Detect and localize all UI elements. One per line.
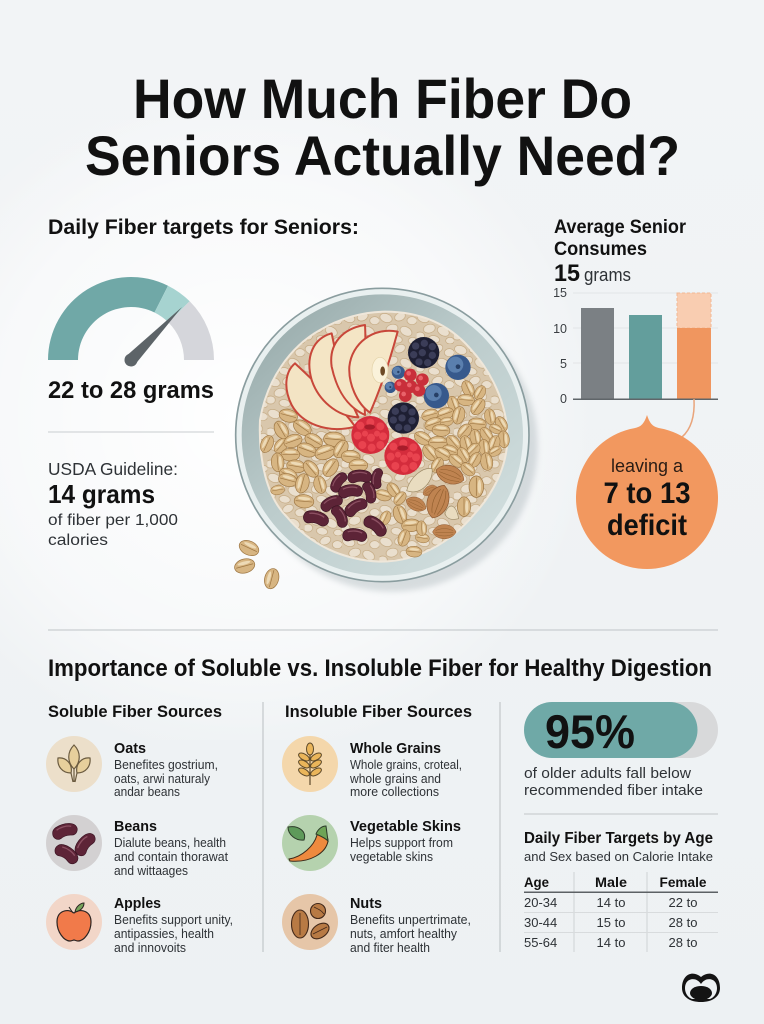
text: whole grains: more collections	[350, 785, 439, 799]
heading: average senior: Average Senior	[554, 217, 687, 238]
apple slices	[286, 325, 398, 429]
section heading: Importance of Soluble vs. Insoluble Fiber for Healthy Digestion	[48, 655, 712, 682]
heading: daily fiber targets: Daily Fiber targets for Seniors:	[48, 216, 359, 239]
icon: logo	[682, 974, 720, 1002]
heading: average senior: grams	[584, 265, 631, 285]
usda guideline text	[48, 459, 178, 549]
panel: daily fiber targets	[48, 216, 359, 549]
text: nuts: and fiter health	[350, 941, 430, 955]
bar chart: 5	[560, 357, 567, 371]
gauge value: 22 to 28 grams	[48, 377, 214, 404]
text: whole grains: Whole grains, croteal,	[350, 758, 462, 772]
text: beans: and contain thorawat	[114, 850, 229, 864]
data table: 14 to	[597, 895, 625, 910]
heading: average senior: Consumes	[554, 239, 647, 260]
text: nuts: nuts, amfort healthy	[350, 927, 458, 941]
text: beans	[114, 818, 229, 878]
oats: right cluster	[412, 379, 510, 516]
title: How Much Fiber Do	[133, 67, 632, 130]
text: apples	[114, 895, 233, 955]
text: oats	[114, 740, 218, 799]
icon: vegetable skins	[282, 815, 338, 871]
heading: insoluble: Insoluble Fiber Sources	[285, 702, 472, 721]
text: oats: oats, arwi naturaly	[114, 772, 211, 786]
text: oats: andar beans	[114, 785, 180, 799]
data table: 22 to	[669, 895, 697, 910]
heading: soluble: Soluble Fiber Sources	[48, 702, 222, 721]
text: oats: Benefites gostrium,	[114, 758, 218, 772]
data table: 28 to	[669, 915, 697, 930]
bar chart: 0	[560, 392, 567, 406]
bar chart: 10	[553, 322, 567, 336]
bar chart: 15	[553, 286, 567, 300]
text: whole grains: whole grains and	[349, 772, 441, 786]
icon: nuts	[282, 894, 338, 950]
panel: soluble fiber sources	[46, 702, 233, 955]
stat value: 95%	[545, 705, 635, 758]
text: nuts: Benefits unpertrimate,	[350, 913, 471, 927]
deficit callout: leaving a	[611, 455, 684, 476]
data table: Male	[595, 874, 627, 890]
progress pill	[524, 702, 718, 758]
icon: oats	[46, 736, 102, 792]
data table: 14 to	[597, 935, 625, 950]
text: vegetable skins: vegetable skins	[350, 850, 433, 864]
data table: Female	[660, 874, 707, 890]
oats: left cluster	[258, 407, 430, 558]
text: apples: and innovoits	[114, 941, 186, 955]
data table: 15 to	[597, 915, 625, 930]
panel: fiber targets table	[524, 830, 718, 952]
text: beans: Dialute beans, health	[114, 836, 226, 850]
deficit callout: 7 to 13	[604, 477, 690, 510]
heading: average senior: 15	[554, 260, 580, 287]
text: whole grains	[349, 740, 462, 799]
heading: average senior	[554, 217, 687, 287]
usda guideline text: of fiber per 1,000	[48, 512, 178, 529]
text: oats: Oats	[114, 740, 146, 757]
text: vegetable skins	[350, 818, 461, 864]
data table: Age	[524, 874, 549, 890]
nuts	[404, 461, 467, 539]
berries	[351, 337, 471, 475]
panel: average senior consumes	[553, 217, 718, 569]
text: nuts	[350, 895, 471, 955]
text: whole grains: Whole Grains	[350, 740, 441, 757]
text: beans: and wittaages	[114, 864, 188, 878]
illustration: oatmeal bowl	[233, 288, 538, 592]
deficit callout	[576, 415, 718, 569]
title	[85, 67, 680, 187]
table heading	[524, 830, 713, 864]
panel: insoluble fiber sources	[282, 702, 472, 955]
text: vegetable skins: Vegetable Skins	[350, 818, 461, 835]
usda guideline text: USDA Guideline:	[48, 459, 178, 479]
kidney beans	[302, 468, 390, 543]
bar chart	[553, 286, 718, 406]
data table: 28 to	[669, 935, 697, 950]
text: apples: Apples	[114, 895, 161, 912]
gauge chart	[48, 277, 214, 366]
icon: apple	[46, 894, 102, 950]
usda guideline text: calories	[48, 532, 108, 549]
text: beans: Beans	[114, 818, 157, 835]
text: apples: antipassies, health	[114, 927, 214, 941]
data table: 20-34	[524, 895, 557, 910]
panel: 95 percent stat	[524, 702, 718, 799]
text: vegetable skins: Helps support from	[350, 836, 453, 850]
stat caption	[524, 765, 703, 799]
data table: 55-64	[524, 935, 557, 950]
text: apples: Benefits support unity,	[114, 913, 233, 927]
data table: 30-44	[524, 915, 557, 930]
connector line	[682, 399, 694, 437]
title: Seniors Actually Need?	[85, 124, 680, 187]
icon: whole grains	[282, 736, 338, 792]
deficit callout: deficit	[607, 509, 687, 542]
table heading: and Sex based on Calorie Intake	[524, 849, 713, 864]
usda guideline text: 14 grams	[48, 479, 155, 509]
table heading: Daily Fiber Targets by Age	[524, 830, 713, 847]
icon: beans	[46, 815, 102, 871]
data table	[524, 872, 718, 952]
loose oats	[233, 537, 281, 590]
stat caption: of older adults fall below	[524, 765, 691, 782]
stat caption: recommended fiber intake	[524, 782, 703, 799]
porridge	[260, 312, 507, 562]
text: nuts: Nuts	[350, 895, 382, 912]
